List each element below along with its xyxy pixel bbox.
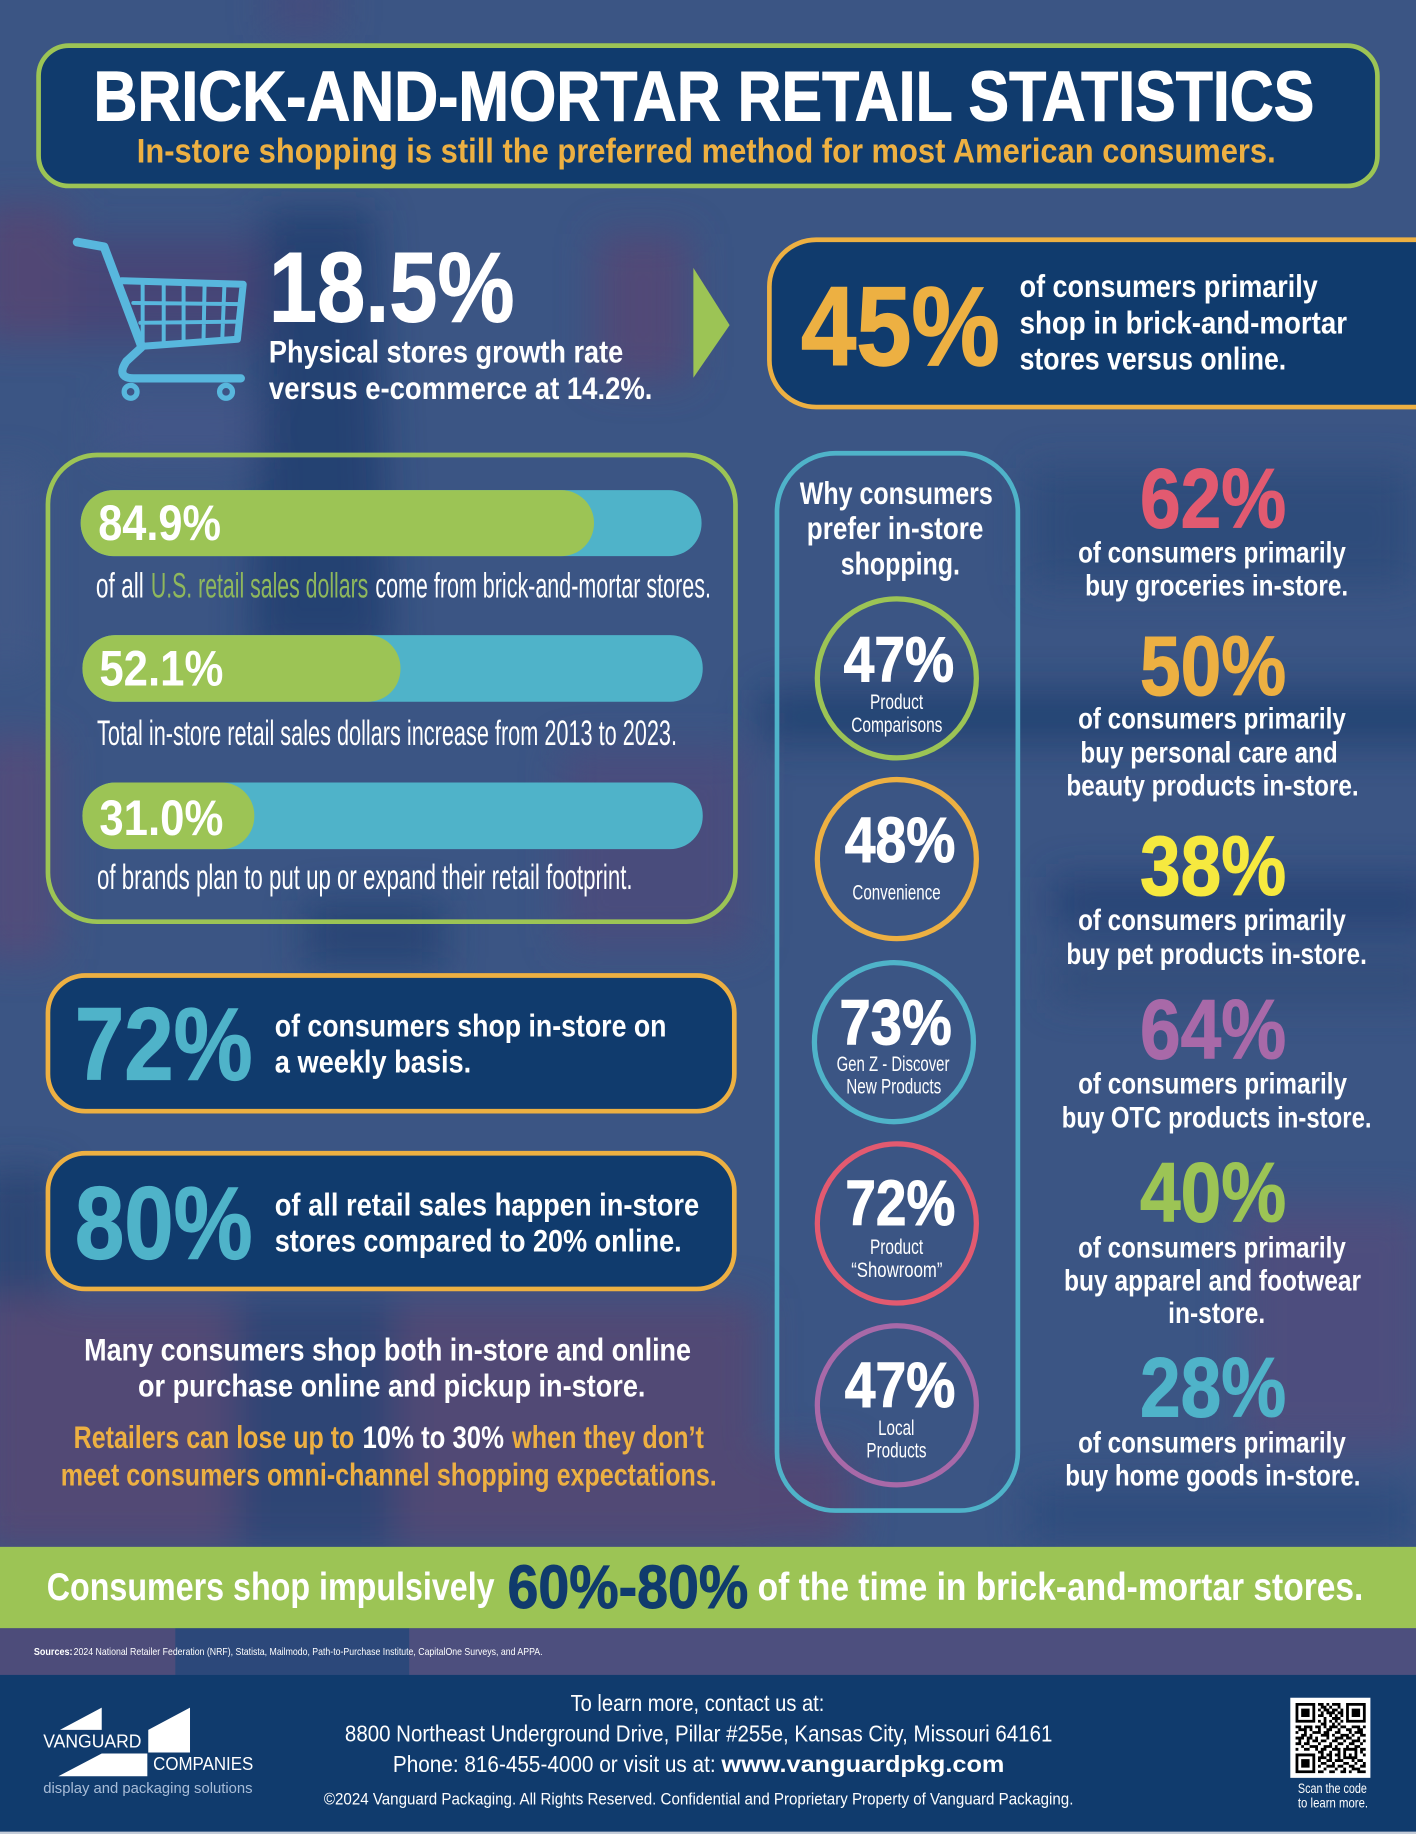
bar: 31.0%: 31.0% xyxy=(99,789,223,846)
callout: 72% weekly xyxy=(48,975,734,1111)
circle: 73% gen z: New Products xyxy=(846,1074,941,1099)
callout: 72% weekly: 72% xyxy=(75,987,253,1102)
caption: 84.9% xyxy=(96,567,711,606)
text: omni-channel note: when they don’t xyxy=(511,1419,704,1455)
stat: 18.5% growth xyxy=(269,233,652,406)
circle: 47% product comparisons: 47% xyxy=(844,623,954,695)
callout: 45%: 45% xyxy=(801,263,1000,389)
caption: 52.1%: Total in-store retail sales dollars increase from 2013 to 2023. xyxy=(97,714,677,753)
icon: shopping cart xyxy=(77,242,243,398)
callout: 80% of sales: of all retail sales happen in-store xyxy=(275,1186,699,1222)
logo: Vanguard Companies: display and packaging solutions xyxy=(43,1780,253,1797)
callout: 80% of sales xyxy=(48,1153,734,1289)
circle: 72% showroom: “Showroom” xyxy=(851,1257,942,1282)
panel: why consumers prefer in-store xyxy=(777,453,1018,1511)
panel: progress bars xyxy=(48,455,735,922)
arrow xyxy=(693,268,730,378)
stat: 28% home goods: of consumers primarily xyxy=(1078,1427,1346,1460)
circle: 73% gen z: Gen Z - Discover xyxy=(837,1051,949,1076)
callout: 45%: stores versus online. xyxy=(1020,341,1286,377)
circle: 72% showroom: 72% xyxy=(845,1167,955,1239)
stat: 62% groceries: of consumers primarily xyxy=(1078,537,1346,570)
subtitle: In-store shopping is still the preferred method for most American consumers. xyxy=(137,133,1276,171)
stat: 50% personal care: buy personal care and xyxy=(1080,737,1338,770)
title banner xyxy=(39,46,1377,186)
bar: 31.0% xyxy=(82,782,703,849)
panel heading xyxy=(800,475,993,581)
stat: 62% groceries: 62% xyxy=(1140,451,1286,546)
stat: 40% apparel: in-store. xyxy=(1168,1297,1265,1330)
circle: 47% local products: Local xyxy=(878,1415,914,1440)
QR caption: to learn more. xyxy=(1298,1796,1368,1811)
panel heading: Why consumers xyxy=(800,475,993,511)
stat: 38% pet products: of consumers primarily xyxy=(1078,904,1346,937)
sources: 2024 National Retailer Federation (NRF), Statista, Mailmodo, Path-to-Purchase Institute, CapitalOne Surveys, and APPA. xyxy=(74,1646,543,1658)
callout: 72% weekly: of consumers shop in-store on xyxy=(275,1007,666,1043)
text: omni-channel note: 10% to 30% xyxy=(362,1419,504,1455)
stat: 50% personal care: beauty products in-store. xyxy=(1066,769,1359,802)
callout: 45%: shop in brick-and-mortar xyxy=(1020,304,1347,340)
caption: 84.9%: come from brick-and-mortar stores. xyxy=(375,567,711,606)
text: omni-channel note: or purchase online and pickup in-store. xyxy=(138,1368,645,1404)
stat: 28% home goods xyxy=(1065,1340,1360,1492)
logo: Vanguard Companies: VANGUARD xyxy=(43,1731,141,1751)
caption: 84.9%: of all xyxy=(96,567,144,606)
stat: 50% personal care: 50% xyxy=(1140,619,1286,713)
text: omni-channel note: meet consumers omni-channel shopping expectations. xyxy=(61,1456,717,1492)
contact details: www.vanguardpkg.com xyxy=(720,1751,1004,1777)
stat: 18.5% growth: Physical stores growth rate xyxy=(269,334,623,370)
caption: 31.0%: of brands plan to put up or expand their retail footprint. xyxy=(97,858,633,897)
logo: Vanguard Companies xyxy=(43,1708,253,1797)
bar: 52.1%: 52.1% xyxy=(99,639,223,696)
stat: 50% personal care: of consumers primarily xyxy=(1078,703,1346,736)
circle: 47% local products xyxy=(817,1326,976,1485)
circle: 72% showroom: Product xyxy=(870,1234,923,1259)
QR caption xyxy=(1298,1781,1368,1811)
stat: 40% apparel: of consumers primarily xyxy=(1078,1231,1346,1264)
circle: 72% showroom xyxy=(817,1144,976,1303)
sources: Sources: xyxy=(34,1646,72,1658)
stat: 64% OTC: 64% xyxy=(1140,983,1286,1077)
callout: 45% xyxy=(769,240,1416,407)
bar: 84.9% xyxy=(81,490,702,556)
stat: 18.5% growth: 18.5% xyxy=(269,233,514,344)
stat: 40% apparel: 40% xyxy=(1140,1146,1286,1240)
stat: 28% home goods: 28% xyxy=(1140,1340,1286,1434)
stat: 64% OTC xyxy=(1062,983,1372,1135)
circle: 73% gen z xyxy=(814,963,973,1122)
circle: 73% gen z: 73% xyxy=(840,986,952,1058)
contact details xyxy=(345,1690,1052,1777)
circle: 48% convenience xyxy=(817,780,976,939)
stat: 64% OTC: of consumers primarily xyxy=(1078,1068,1347,1101)
circle: 47% product comparisons xyxy=(817,599,976,758)
callout: 80% of sales: 80% xyxy=(75,1166,253,1281)
stat: 40% apparel: buy apparel and footwear xyxy=(1064,1265,1361,1298)
text: omni-channel note xyxy=(61,1331,717,1492)
panel heading: shopping. xyxy=(841,545,960,581)
circle: 47% product comparisons: Comparisons xyxy=(851,712,943,737)
bar: 52.1% xyxy=(82,635,703,702)
logo: Vanguard Companies: COMPANIES xyxy=(153,1754,253,1774)
stat: 62% groceries xyxy=(1078,451,1348,602)
bar: 84.9%: 84.9% xyxy=(98,494,221,551)
stat: 40% apparel xyxy=(1064,1146,1361,1330)
circle: 48% convenience: Convenience xyxy=(852,879,941,904)
text: omni-channel note: Many consumers shop both in-store and online xyxy=(84,1331,691,1367)
stat: 38% pet products xyxy=(1066,819,1367,971)
footer xyxy=(0,1675,1416,1834)
stat: 50% personal care xyxy=(1066,619,1359,802)
QR caption: Scan the code xyxy=(1298,1781,1367,1796)
callout: 45%: of consumers primarily xyxy=(1020,268,1318,304)
copyright: ©2024 Vanguard Packaging. All Rights Reserved. Confidential and Proprietary Property of Vanguard Packaging. xyxy=(324,1791,1073,1809)
green band: impulse shopping xyxy=(0,1547,1416,1628)
caption: 84.9%: U.S. retail sales dollars xyxy=(151,567,368,606)
contact details: 8800 Northeast Underground Drive, Pillar #255e, Kansas City, Missouri 64161 xyxy=(345,1721,1052,1747)
stat: 62% groceries: buy groceries in-store. xyxy=(1085,569,1348,602)
text: omni-channel note: Retailers can lose up to xyxy=(74,1419,354,1455)
stat: 18.5% growth: versus e-commerce at 14.2%. xyxy=(269,370,652,406)
circle: 48% convenience: 48% xyxy=(845,804,955,876)
contact details: To learn more, contact us at: xyxy=(571,1690,824,1716)
stat: 38% pet products: 38% xyxy=(1140,819,1286,913)
circle: 47% local products: Products xyxy=(866,1437,927,1462)
callout: 80% of sales: stores compared to 20% online. xyxy=(275,1223,682,1259)
contact details: Phone: 816-455-4000 or visit us at: xyxy=(393,1751,716,1777)
green band: impulse shopping: 60%-80% xyxy=(507,1553,748,1621)
callout: 72% weekly: a weekly basis. xyxy=(275,1044,471,1080)
circle: 47% product comparisons: Product xyxy=(870,689,923,714)
panel heading: prefer in-store xyxy=(807,510,983,546)
QR code xyxy=(1290,1698,1370,1778)
green band: impulse shopping: Consumers shop impulsively xyxy=(47,1566,495,1609)
circle: 47% local products: 47% xyxy=(845,1349,955,1421)
